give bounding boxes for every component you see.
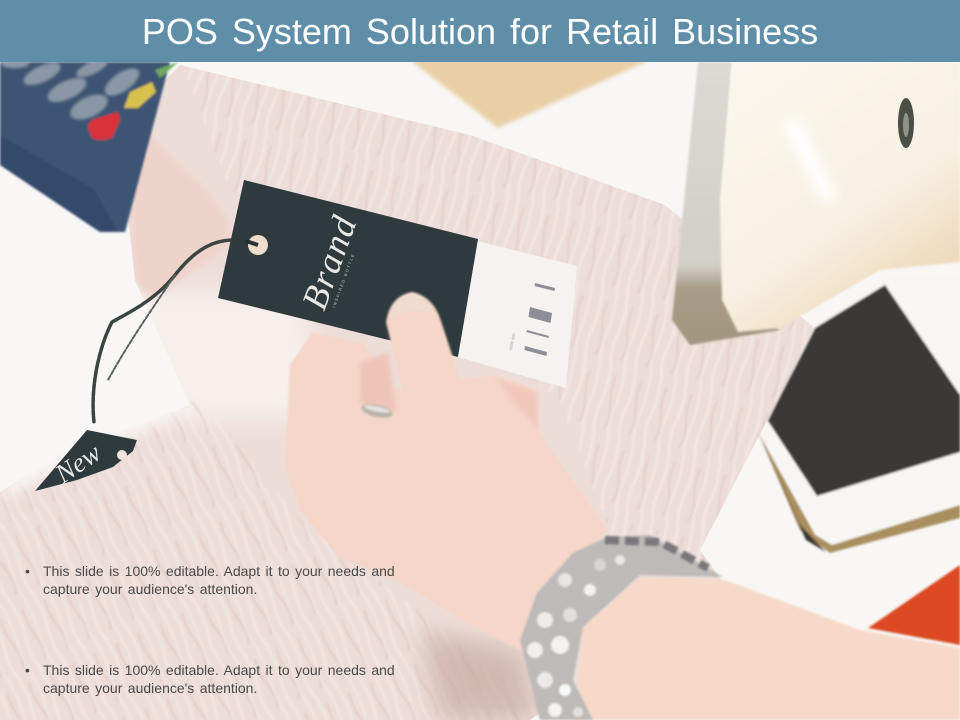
scanner — [672, 62, 960, 345]
book — [410, 60, 650, 128]
collar fold — [128, 135, 232, 300]
bullet text 2: This slide is 100% editable. Adapt it to your needs and capture your audience's attention. — [43, 662, 395, 696]
hand back and fingers — [285, 333, 607, 655]
thumb — [386, 292, 520, 450]
text: • — [25, 563, 30, 579]
title: POS System Solution for Retail Business — [142, 11, 818, 52]
header bar — [0, 0, 960, 62]
red object — [868, 565, 960, 645]
shadow under wrist — [420, 630, 540, 720]
small tag — [35, 430, 137, 491]
tag string — [93, 240, 246, 422]
tablet phone — [758, 275, 960, 553]
fabric garment — [0, 65, 814, 720]
bullet text 1: This slide is 100% editable. Adapt it to your needs and capture your audience's attention. — [43, 563, 395, 597]
small tag: New — [49, 437, 106, 490]
brand tag — [218, 180, 577, 388]
forearm — [575, 578, 960, 720]
brand tag: 0000 000 — [508, 332, 517, 350]
brand tag: INSPIRED BOTTLE — [331, 252, 356, 308]
text: • — [25, 662, 30, 678]
tag logo text: Brand — [294, 210, 365, 315]
card terminal — [0, 55, 178, 232]
watch band — [520, 535, 723, 720]
